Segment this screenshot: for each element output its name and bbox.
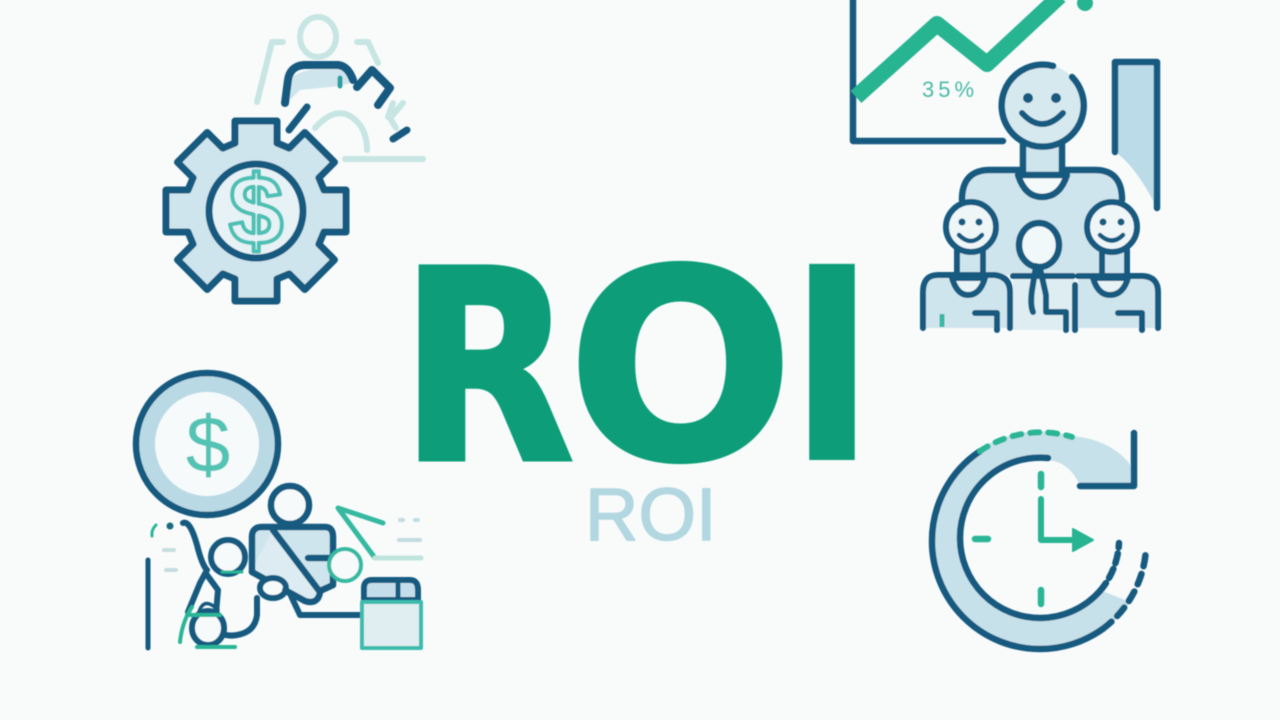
faded person outline [257,17,423,159]
large body [962,170,1122,275]
inner arc dashes [1100,543,1119,591]
icon: happy team [923,62,1158,330]
gear body [166,121,346,301]
small person with connector [180,523,360,647]
middle tie figure [1013,223,1075,330]
large person [252,486,333,602]
coin [136,373,278,515]
letter O: O [568,215,793,521]
icon: coin and team [136,373,421,648]
left decoration [148,522,176,648]
light ring and arrow band [930,431,1134,651]
gear hub [209,164,303,258]
line end dot [1077,0,1093,11]
coin dollar sign: $ [186,400,230,489]
clock arrowhead [1073,529,1093,551]
side panel [1115,62,1157,208]
letter R: R [400,214,574,521]
top teal dashes [980,432,1072,451]
clock hands [1041,499,1080,540]
collar [1018,175,1067,197]
teal hexagon circle [329,549,361,581]
left small person [923,202,1010,330]
outer arc [932,451,1103,649]
right small person [1078,202,1158,330]
icon: gear with dollar [166,121,346,301]
chart axes [853,0,1003,141]
outer arc dashes [1103,549,1146,629]
title: ROI [400,211,877,524]
folder box [362,580,421,648]
dollar sign: $ [229,155,283,265]
chart label: 35% [922,77,978,102]
large smiling face [1001,64,1084,147]
growth line [856,0,1060,97]
letter I: I [787,211,877,524]
return arrow [1080,433,1134,486]
dark arm and shoulder [285,65,407,139]
subtitle: ROI: ROI [585,473,717,556]
icon: growth chart [853,0,1093,141]
inner dial arc [960,458,1100,618]
neck [1023,140,1062,172]
clock ticks [975,474,1041,604]
teal arrow and lines [338,508,421,558]
icon: person behind gear [257,17,423,159]
icon: clock with return arrow [930,431,1146,651]
